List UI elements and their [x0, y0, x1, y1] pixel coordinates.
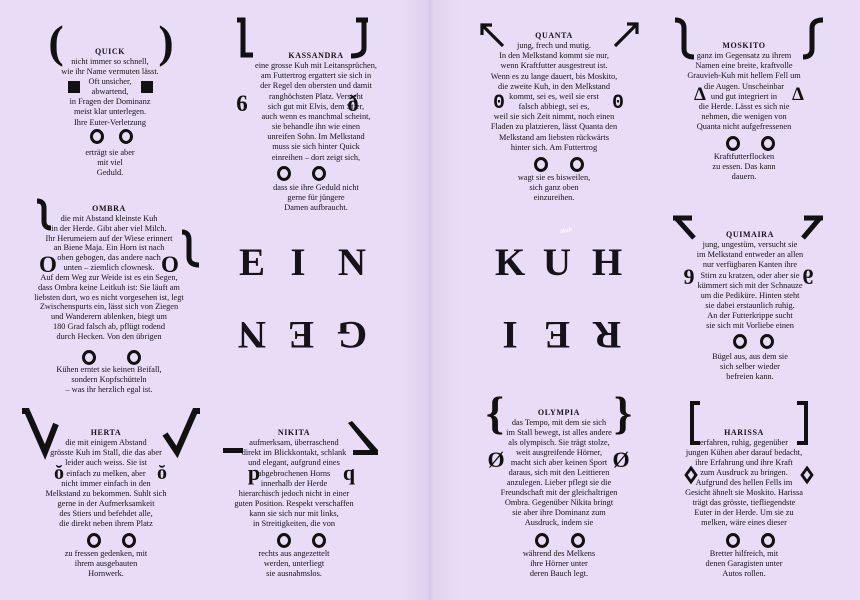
icon: olympia slashed o: Ø	[612, 447, 630, 472]
headline: KUH	[495, 241, 622, 284]
panel: quimaira: jung, ungestüm, versucht sie	[703, 240, 797, 249]
panel: quanta: wenn Kraftfutter ausgestreut ist.	[501, 61, 607, 70]
text: quanta lower	[518, 173, 590, 202]
panel: quick	[61, 46, 159, 127]
panel: quick: wie ihr Name vermuten lässt.	[61, 67, 159, 76]
eyes: ombra	[82, 350, 141, 365]
panel: quimaira: QUIMAIRA	[726, 230, 774, 239]
icon: kassandra brackets	[237, 20, 368, 56]
panel: quimaira: Stirn zu kratzen, oder aber sie	[700, 271, 800, 280]
panel: quimaira: sie dabei erstaunlich ruhig.	[705, 301, 795, 310]
headline: EIN: N	[338, 241, 366, 284]
panel: herta: die mit einigem Abstand	[65, 438, 147, 447]
small note: Muh: Muh	[560, 227, 573, 235]
panel: harissa: ihre Erfahrung und ihre Kraft	[695, 458, 793, 467]
headline: REI upside down: R	[593, 313, 621, 356]
panel: olympia: macht sich aber keinen Sport	[511, 458, 607, 467]
text: moskito lower	[712, 152, 776, 181]
panel: herta: des Stiers und befehdet alle,	[59, 509, 153, 518]
panel: quimaira	[696, 230, 803, 330]
panel: moskito: Namen eine breite, kraftvolle	[695, 61, 793, 70]
text: herta lower: zu fressen gedenken, mit	[65, 549, 147, 558]
panel: nikita: hierarchisch jedoch nicht in einer	[239, 489, 349, 498]
panel: nikita: NIKITA	[278, 428, 310, 437]
text: quimaira lower	[712, 352, 788, 381]
panel: quimaira: sie sich mit Vorliebe einen	[706, 321, 794, 330]
panel: olympia	[500, 408, 618, 527]
panel: quanta: Wenn es zu lange dauert, bis Moskito,	[491, 72, 617, 81]
panel: harissa: jungen Kühen aber darauf bedacht,	[686, 448, 802, 457]
icon: quanta arrows	[482, 24, 637, 46]
panel: kassandra: eine grosse Kuh mit Leitansprüchen,	[255, 61, 377, 70]
text: harissa lower: denen Garagisten unter	[706, 559, 782, 568]
eyes: kassandra	[277, 166, 326, 181]
panel: olympia: weit ausgreifende Hörner,	[516, 448, 602, 457]
icon: kassandra glyphs 6 and eth: 6	[236, 91, 248, 116]
icon: harissa diamonds	[686, 468, 812, 482]
panel: quanta: weil sie sich Zeit nimmt, noch einen	[494, 112, 614, 121]
panel: moskito: ganz im Gegensatz zu ihrem	[697, 51, 791, 60]
text: quick lower: erträgt sie aber	[85, 148, 135, 157]
headline: GEN upside down: G	[337, 313, 367, 356]
text: kassandra lower: Damen aufbraucht.	[284, 203, 348, 212]
panel: quanta	[490, 31, 617, 152]
icon: quick parentheses	[48, 16, 174, 67]
panel: quick: in Fragen der Dominanz	[70, 97, 150, 106]
text: nikita lower	[258, 549, 330, 578]
panel: moskito: die Augen. Unscheinbar	[704, 82, 784, 91]
icon: nikita p q	[248, 460, 356, 485]
text: olympia lower	[522, 549, 595, 578]
icon: quimaira nines: 9	[684, 264, 694, 289]
panel: ombra: dass Ombra keine Leitkuh ist: Sie läuft am	[38, 283, 180, 292]
panel: nikita: guten Position. Respekt verschaffen	[234, 499, 354, 508]
text: herta lower	[65, 549, 148, 578]
icon: ombra O glyphs: O	[39, 252, 57, 277]
headline: KUH: U	[543, 241, 571, 284]
eyes: herta	[87, 533, 136, 548]
panel: quick: Ihre Euter-Verletzung	[74, 118, 146, 127]
panel: herta: nicht immer einfach in den	[61, 479, 151, 488]
panel: ombra: die mit Abstand kleinste Kuh	[61, 214, 157, 223]
panel: olympia: Ausdruck, indem sie	[525, 518, 593, 527]
icon: quimaira nines: 9	[802, 264, 814, 289]
panel: harissa	[685, 428, 803, 527]
panel: quanta: kommt, sei es, weil sie erst	[509, 92, 599, 101]
panel: quanta: jung, frech und mutig.	[517, 41, 591, 50]
icon: kassandra glyphs 6 and eth: ð	[347, 91, 359, 116]
icon: olympia braces: }	[614, 387, 632, 438]
panel: kassandra: unreifen Sohn. Im Melkstand	[267, 132, 365, 141]
panel: quimaira: kümmert sich mit der Schnauze	[697, 281, 803, 290]
eyes: quanta	[534, 157, 584, 172]
panel: moskito: Quanta nicht aufgefressenen	[697, 122, 791, 131]
text: nikita lower: werden, unterliegt	[264, 559, 324, 568]
headline: REI upside down: E	[544, 313, 570, 356]
text: olympia lower: ihre Hörner unter	[530, 559, 588, 568]
panel: moskito: Grauvieh-Kuh mit hellem Fell um	[687, 71, 801, 80]
panel: ombra: Ihr Herumeiern auf der Wiese erinnert	[46, 234, 172, 243]
icon: nikita dash and angle	[223, 421, 378, 455]
text: moskito lower: Kraftfutterflocken	[714, 152, 774, 161]
icon: moskito triangles	[694, 84, 804, 105]
text: harissa lower	[706, 549, 782, 578]
panel: olympia: anzulegen. Lieber pflegt sie die	[507, 478, 611, 487]
panel: olympia: im Stall bewegt, ist alles andere	[506, 428, 612, 437]
panel: nikita: und elegant, aufgrund eines	[248, 458, 340, 467]
panel: nikita: kann sie sich nur mit links,	[249, 509, 339, 518]
panel: herta: leider auch weiss. Sie ist	[65, 458, 147, 467]
panel: quimaira: An der Futterkrippe sucht	[707, 311, 793, 320]
panel: moskito: die Herde. Lässt es sich nie	[699, 102, 789, 111]
panel: harissa: zum Ausdruck zu bringen.	[700, 468, 788, 477]
panel: ombra: OMBRA	[92, 204, 126, 213]
text: quimaira lower: befreien kann.	[726, 372, 774, 381]
headline: EIN: I	[290, 241, 306, 284]
eyes: moskito	[726, 136, 775, 151]
text: nikita lower: sie ausnahmslos.	[266, 569, 322, 578]
icon: quimaira sevens	[673, 218, 823, 238]
panel: kassandra: ranghöchsten Platz. Versteht	[269, 92, 363, 101]
panel: herta: die direkt neben ihrem Platz	[59, 519, 153, 528]
panel: quimaira: nur verfügbaren Kanten ihre	[703, 260, 797, 269]
icon: olympia slashed o: Ø	[487, 447, 505, 472]
icon: moskito triangles: Δ	[792, 84, 804, 105]
panel: quimaira: im Melkstand entweder an allen	[697, 250, 803, 259]
icon: herta root signs	[22, 411, 200, 452]
panel: harissa: trägt das grösste, tiefliegendste	[693, 498, 795, 507]
text: quanta lower: einzureihen.	[534, 193, 574, 202]
text: kassandra lower: gerne für jüngere	[287, 193, 345, 202]
panel: herta	[46, 428, 166, 528]
panel: nikita: abgebrochenen Horns	[258, 469, 330, 478]
panel: quanta: Fladen zu platzieren, lässt Quanta den	[491, 122, 617, 131]
panel: herta: HERTA	[91, 428, 121, 437]
headline: GEN upside down	[238, 313, 367, 356]
panel: quanta: QUANTA	[535, 31, 573, 40]
panel: moskito	[687, 41, 801, 131]
panel: ombra: Zwischenspurts ein, lässt sich von Ziegen	[40, 302, 178, 311]
icon: kassandra glyphs 6 and eth	[236, 91, 359, 116]
panel: ombra	[34, 204, 184, 341]
panel: kassandra: muss sie sich hinter Quick	[272, 142, 360, 151]
panel: harissa: HARISSA	[724, 428, 764, 437]
panel: herta: Melkstand zu bekommen. Suhlt sich	[46, 489, 166, 498]
panel: olympia: OLYMPIA	[538, 408, 580, 417]
icon: harissa brackets	[692, 403, 806, 443]
panel: ombra: liebsten dort, wo es nicht vorgesehen ist, legt	[34, 293, 184, 302]
eyes: quimaira	[733, 334, 774, 349]
headline: GEN upside down: N	[238, 313, 266, 356]
eyes: harissa	[726, 533, 775, 548]
panel: moskito: und gut integriert in	[711, 92, 777, 101]
panel: quanta: hinter sich. Am Futtertrog	[511, 143, 597, 152]
panel: harissa: Gesicht ähnelt sie Moskito. Harissa	[685, 488, 803, 497]
icon: olympia braces	[486, 387, 632, 438]
panel: olympia: als olympisch. Sie trägt stolze,	[508, 438, 610, 447]
icon: quimaira nines	[684, 264, 814, 289]
icon: quanta zeros: 0	[612, 92, 624, 115]
eyes: quick	[90, 129, 133, 144]
panel: nikita: innerhalb der Herde	[261, 479, 327, 488]
text: ombra lower: sondern Kopfschütteln	[71, 375, 147, 384]
panel: kassandra: sich gut mit Elvis, dem Stier,	[268, 102, 364, 111]
eyes: nikita	[277, 533, 326, 548]
headline: KUH: K	[495, 241, 525, 284]
panel: quanta: Melkstand am liebsten rückwärts	[499, 133, 609, 142]
panel: quanta: falsch abbiegt, sei es,	[519, 102, 589, 111]
icon: ombra O glyphs	[39, 252, 179, 277]
text: olympia lower: deren Bauch legt.	[530, 569, 588, 578]
headline: GEN upside down: E	[288, 313, 314, 356]
panel: nikita: direkt im Blickkontakt, schlank	[242, 448, 346, 457]
panel: olympia: Ombra. Gegenüber Nikita bringt	[505, 498, 613, 507]
icon: ombra hooks	[37, 201, 199, 265]
panel: quick: abwartend,	[92, 87, 128, 96]
panel: ombra: und Wanderern ablenken, biegt um	[51, 312, 167, 321]
panel: ombra: durch Hecken. Von den übrigen	[56, 332, 162, 341]
text: quick lower: mit viel	[97, 158, 123, 167]
headline: REI upside down: I	[502, 313, 518, 356]
icon: olympia slashed o	[487, 447, 630, 472]
panel: olympia: Freundschaft mit der gleichaltrigen	[501, 488, 617, 497]
headline: EIN: E	[239, 241, 265, 284]
eyes: olympia	[535, 533, 585, 548]
text: kassandra lower	[273, 183, 359, 212]
icon: quick parentheses: )	[158, 16, 174, 67]
panel: nikita: in Streitigkeiten, die von	[253, 519, 335, 528]
icon: nikita p q: q	[343, 460, 356, 485]
text: moskito lower: zu essen. Das kann	[712, 162, 776, 171]
panel: ombra: an Biene Maja. Ein Horn ist nach	[54, 243, 164, 252]
panel: kassandra: auch wenn es manchmal scheint,	[262, 112, 370, 121]
text: quick lower: Geduld.	[97, 168, 123, 177]
panel: kassandra: sie behandle ihn wie einen	[272, 122, 360, 131]
panel: quick: meist klar unterlegen.	[74, 107, 146, 116]
icon: moskito triangles: Δ	[694, 84, 706, 105]
panel: quanta: die zweite Kuh, in den Melkstand	[498, 82, 610, 91]
icon: moskito hooks	[675, 20, 823, 57]
panel: olympia: sie aber ihre Dominanz zum	[512, 508, 606, 517]
panel: ombra: unten – ziemlich clownesk.	[64, 263, 154, 272]
panel: herta: gerne in der Aufmerksamkeit	[58, 499, 154, 508]
text: quanta lower: wagt sie es bisweilen,	[518, 173, 590, 182]
panel: kassandra: KASSANDRA	[288, 51, 344, 60]
panel: quanta: In den Melkstand kommt sie nur,	[499, 51, 609, 60]
text: herta lower: Hornwerk.	[88, 569, 124, 578]
icon: quanta zeros: 0	[493, 92, 505, 115]
text: quimaira lower: Bügel aus, aus dem sie	[712, 352, 788, 361]
panel: olympia: das Tempo, mit dem sie sich	[512, 418, 606, 427]
panel: nikita	[234, 428, 354, 528]
text: nikita lower: rechts aus angezettelt	[259, 549, 329, 558]
panel: ombra: oben gebogen, das andere nach	[57, 253, 161, 262]
icon: quanta zeros	[493, 92, 624, 115]
headline: REI upside down	[502, 313, 621, 356]
text: kassandra lower: dass sie ihre Geduld nicht	[273, 183, 359, 192]
text: quanta lower: sich ganz oben	[529, 183, 579, 192]
text: ombra lower: Kühen erntet sie keinen Beifall,	[56, 365, 162, 374]
icon: herta o-breve: ŏ	[54, 462, 64, 484]
panel: olympia: daraus, sich mit den Leittieren	[509, 468, 609, 477]
panel: moskito: nehmen, die wenigen von	[701, 112, 787, 121]
panel: harissa: melken, wäre eines dieser	[701, 518, 787, 527]
text: ombra lower: – was ihr herzlich egal ist.	[65, 385, 153, 394]
text: harissa lower: Autos rollen.	[722, 569, 766, 578]
icon: ombra O glyphs: O	[161, 252, 179, 277]
icon: quick parentheses: (	[48, 16, 64, 67]
icon: nikita p q: p	[248, 460, 260, 485]
icon: quick squares	[68, 81, 153, 93]
panel: kassandra	[255, 51, 377, 162]
text: moskito lower: dauern.	[732, 172, 756, 181]
panel: kassandra: einreihen – dort zeigt sich,	[272, 153, 360, 162]
text: harissa lower: Bretter hilfreich, mit	[710, 549, 778, 558]
panel: ombra: in der Herde. Gibt aber viel Milch.	[51, 224, 167, 233]
text: herta lower: ihrem ausgebauten	[75, 559, 137, 568]
panel: nikita: aufmerksam, überraschend	[249, 438, 339, 447]
panel: quick: nicht immer so schnell,	[71, 57, 149, 66]
icon: herta o-breve	[54, 462, 167, 484]
text: quick lower	[85, 148, 135, 177]
panel: harissa: Aufgrund des hellen Fells im	[696, 478, 792, 487]
headline: EIN	[239, 241, 366, 284]
panel: kassandra: am Futtertrog ergattert sie sich in	[261, 71, 371, 80]
panel: kassandra: der Regel den obersten und damit	[260, 81, 372, 90]
panel: herta: grösste Kuh im Stall, die das aber	[50, 448, 162, 457]
text: olympia lower: während des Melkens	[523, 549, 595, 558]
text: ombra lower	[56, 365, 162, 394]
panel: quick: QUICK	[95, 46, 125, 56]
headline: KUH: H	[592, 241, 622, 284]
panel: harissa: Euter in der Herde. Um sie zu	[694, 508, 794, 517]
panel: ombra: Auf dem Weg zur Weide ist es ein Segen,	[40, 273, 178, 282]
panel: quick: Oft unsicher,	[88, 77, 131, 86]
panel: quimaira: um die Pediküre. Hinten steht	[701, 291, 799, 300]
icon: olympia braces: {	[486, 387, 504, 438]
panel: moskito: MOSKITO	[722, 41, 766, 50]
icon: herta o-breve: ŏ	[157, 462, 167, 484]
panel: harissa: erfahren, ruhig, gegenüber	[700, 438, 788, 447]
text: quimaira lower: sich selber wieder	[720, 362, 780, 371]
panel: ombra: 180 Grad falsch ab, pflügt rodend	[53, 322, 165, 331]
panel: herta: einfach zu melken, aber	[66, 469, 146, 478]
